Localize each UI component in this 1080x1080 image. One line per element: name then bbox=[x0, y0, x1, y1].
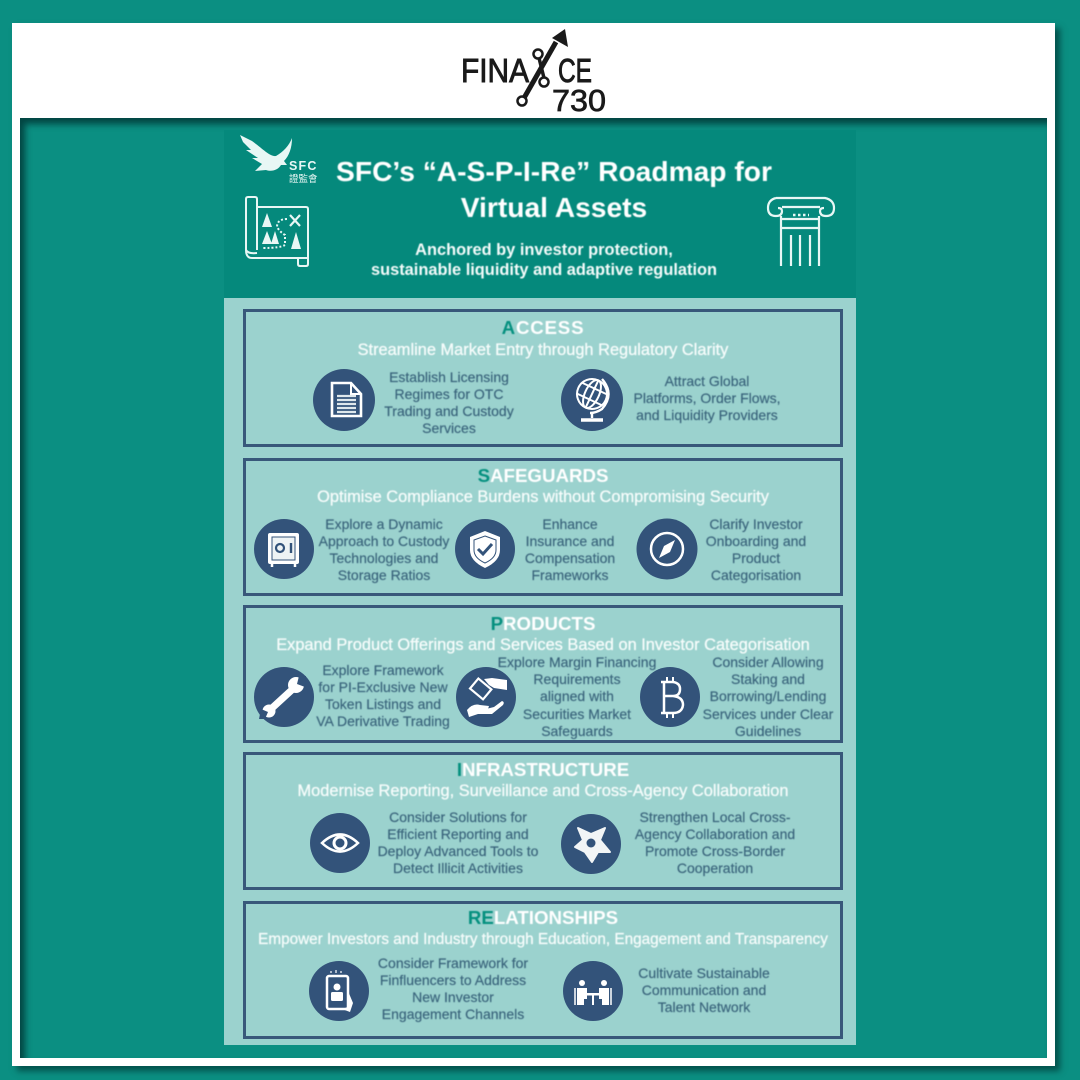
text: licensing: Trading and Custody bbox=[384, 403, 514, 419]
text: staking: Staking and bbox=[731, 671, 805, 687]
icon: wrench bbox=[254, 667, 314, 727]
heading: safeguards: SAFEGUARDS bbox=[478, 465, 608, 486]
text: margin financing: aligned with bbox=[540, 688, 614, 704]
subheading: relationships: Empower Investors and Industry through Education, Engagement and Transparency bbox=[258, 930, 828, 948]
heading: access: ACCESS bbox=[502, 317, 584, 338]
light content panel bbox=[224, 298, 856, 1045]
text: reporting: Detect Illicit Activities bbox=[393, 860, 523, 876]
icon: phone in hand bbox=[309, 961, 369, 1021]
text: licensing: Services bbox=[422, 420, 476, 436]
text: collaboration: Strengthen Local Cross- bbox=[640, 809, 790, 825]
poster header panel bbox=[224, 130, 856, 298]
icon: hand and money bbox=[456, 667, 516, 727]
text: PI-exclusive: Explore Framework bbox=[322, 662, 444, 678]
text: staking: Services under Clear bbox=[703, 706, 833, 722]
text: finfluencers: Consider Framework for bbox=[378, 955, 528, 971]
text: onboarding: Product bbox=[732, 550, 780, 566]
text: PI-exclusive bbox=[316, 662, 450, 730]
icon: SFC eagle logo: 證監會 bbox=[289, 171, 318, 185]
text: custody: Explore a Dynamic bbox=[325, 516, 443, 532]
text: reporting bbox=[378, 809, 538, 876]
subheading: access: Streamline Market Entry through Regulatory Clarity bbox=[358, 341, 728, 359]
text: onboarding bbox=[706, 516, 806, 584]
icon: safe bbox=[254, 519, 314, 579]
text: reporting: Efficient Reporting and bbox=[387, 826, 529, 842]
text: finfluencers: Engagement Channels bbox=[382, 1006, 524, 1022]
text: global platforms: Attract Global bbox=[665, 373, 749, 389]
text: onboarding: Onboarding and bbox=[706, 533, 806, 549]
subtitle: sustainable liquidity and adaptive regulation bbox=[371, 261, 717, 279]
heading: infrastructure: INFRASTRUCTURE bbox=[457, 759, 629, 780]
text: PI-exclusive: for PI-Exclusive New bbox=[318, 679, 448, 695]
text: collaboration: Cooperation bbox=[677, 860, 753, 876]
text: global platforms: and Liquidity Providers bbox=[636, 407, 778, 423]
icon: converging arrows bbox=[561, 814, 621, 874]
subtitle: Anchored by investor protection, bbox=[415, 241, 673, 259]
icon: bitcoin bbox=[640, 667, 700, 727]
text: collaboration bbox=[634, 809, 795, 877]
logo: Finance 730: 730 bbox=[552, 83, 606, 118]
subheading: infrastructure: Modernise Reporting, Surveillance and Cross-Agency Collaboration bbox=[297, 782, 789, 800]
icon: people at table bbox=[563, 961, 623, 1021]
text: finfluencers: Finfluencers to Address bbox=[380, 972, 526, 988]
text: PI-exclusive: VA Derivative Trading bbox=[316, 713, 450, 729]
text: licensing bbox=[384, 369, 514, 436]
text: staking: Borrowing/Lending bbox=[710, 688, 826, 704]
icon: globe bbox=[561, 369, 623, 431]
heading: relationships: RELATIONSHIPS bbox=[468, 907, 618, 928]
subheading: safeguards: Optimise Compliance Burdens without Compromising Security bbox=[317, 488, 769, 506]
panel: access bbox=[243, 309, 843, 447]
text: talent network: Communication and bbox=[642, 982, 766, 998]
icon: SFC eagle logo: SFC bbox=[289, 159, 318, 173]
heading: products: PRODUCTS bbox=[491, 613, 595, 634]
text: custody: Technologies and bbox=[330, 550, 438, 566]
text: reporting: Deploy Advanced Tools to bbox=[378, 843, 538, 859]
text: staking bbox=[702, 654, 834, 739]
title: Virtual Assets bbox=[461, 191, 647, 223]
text: talent network bbox=[638, 965, 770, 1015]
text: talent network: Talent Network bbox=[658, 999, 750, 1015]
logo: Finance 730: CE bbox=[558, 52, 592, 89]
text: PI-exclusive: Token Listings and bbox=[325, 696, 441, 712]
text: insurance: Enhance bbox=[542, 516, 598, 532]
title bbox=[336, 155, 772, 223]
text: custody: Storage Ratios bbox=[338, 567, 430, 583]
icon: document bbox=[313, 369, 375, 431]
text: onboarding: Clarify Investor bbox=[709, 516, 803, 532]
icon: treasure map bbox=[245, 196, 309, 267]
panel: products bbox=[243, 605, 843, 743]
text: talent network: Cultivate Sustainable bbox=[638, 965, 770, 981]
text: custody bbox=[318, 516, 450, 584]
icon: SFC eagle logo bbox=[240, 135, 318, 185]
text: licensing: Regimes for OTC bbox=[395, 386, 503, 402]
text: staking: Consider Allowing bbox=[712, 654, 824, 670]
icon: eye bbox=[310, 813, 370, 873]
panel: safeguards bbox=[243, 458, 843, 596]
text: reporting: Consider Solutions for bbox=[389, 809, 527, 825]
text: margin financing: Securities Market bbox=[523, 706, 631, 722]
text: margin financing: Explore Margin Financing bbox=[498, 654, 656, 670]
logo: Finance 730 bbox=[461, 29, 606, 118]
text: collaboration: Agency Collaboration and bbox=[635, 826, 795, 842]
icon: ionic column bbox=[766, 196, 836, 266]
panel: infrastructure bbox=[243, 752, 843, 890]
text: custody: Approach to Custody bbox=[319, 533, 449, 549]
text: licensing: Establish Licensing bbox=[389, 369, 509, 385]
text: finfluencers bbox=[378, 955, 528, 1023]
subheading: products: Expand Product Offerings and Services Based on Investor Categorisation bbox=[276, 636, 810, 654]
icon: compass bbox=[636, 518, 698, 580]
text: onboarding: Categorisation bbox=[711, 567, 801, 583]
text: finfluencers: New Investor bbox=[412, 989, 494, 1005]
icon: shield bbox=[455, 519, 515, 579]
text: insurance: Frameworks bbox=[531, 567, 608, 583]
text: global platforms bbox=[633, 373, 781, 424]
subtitle bbox=[371, 241, 717, 280]
text: collaboration: Promote Cross-Border bbox=[645, 843, 785, 859]
text: insurance: Compensation bbox=[525, 550, 615, 566]
text: margin financing: Requirements bbox=[533, 671, 621, 687]
logo: Finance 730: FINA bbox=[461, 52, 529, 89]
text: margin financing bbox=[498, 654, 656, 740]
text: insurance bbox=[525, 516, 615, 583]
text: margin financing: Safeguards bbox=[541, 723, 613, 739]
text: staking: Guidelines bbox=[735, 723, 801, 739]
text: global platforms: Platforms, Order Flows, bbox=[633, 390, 781, 406]
title: SFC’s “A-S-P-I-Re” Roadmap for bbox=[336, 155, 772, 187]
panel: relationships bbox=[243, 901, 843, 1039]
text: insurance: Insurance and bbox=[526, 533, 614, 549]
